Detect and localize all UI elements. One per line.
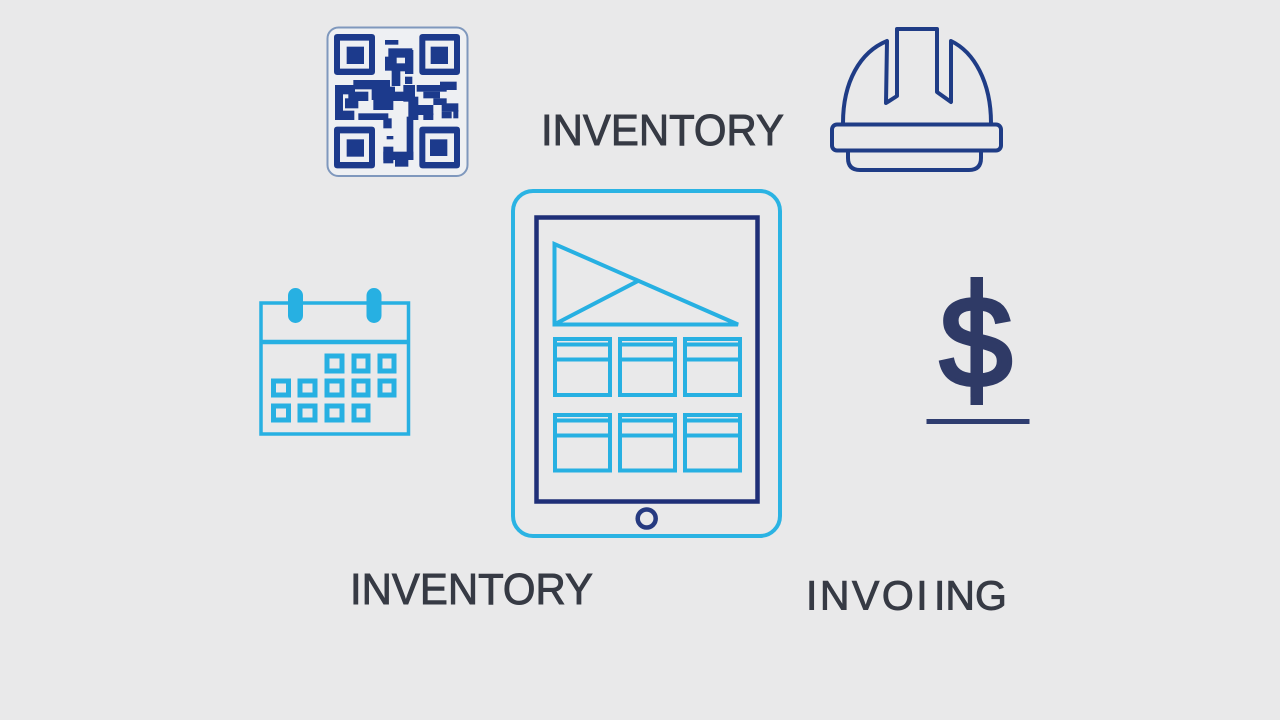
icon: dollar sign with underline <box>926 271 1030 424</box>
heading: inventory top: INVENTORY <box>541 107 784 155</box>
icon: dollar sign with underline: $ <box>940 271 1012 414</box>
icon: hard hat <box>832 29 1001 170</box>
chart: triangle graphic <box>554 244 738 324</box>
icon: tablet <box>513 191 780 536</box>
heading: inventory bottom: INVENTORY <box>350 566 593 614</box>
icon: QR code <box>328 28 468 176</box>
heading: invoicing: ING <box>934 572 1007 618</box>
heading: invoicing: INVOI <box>806 572 930 618</box>
icon: calendar <box>261 288 408 434</box>
table: grid of six cells <box>555 339 740 470</box>
